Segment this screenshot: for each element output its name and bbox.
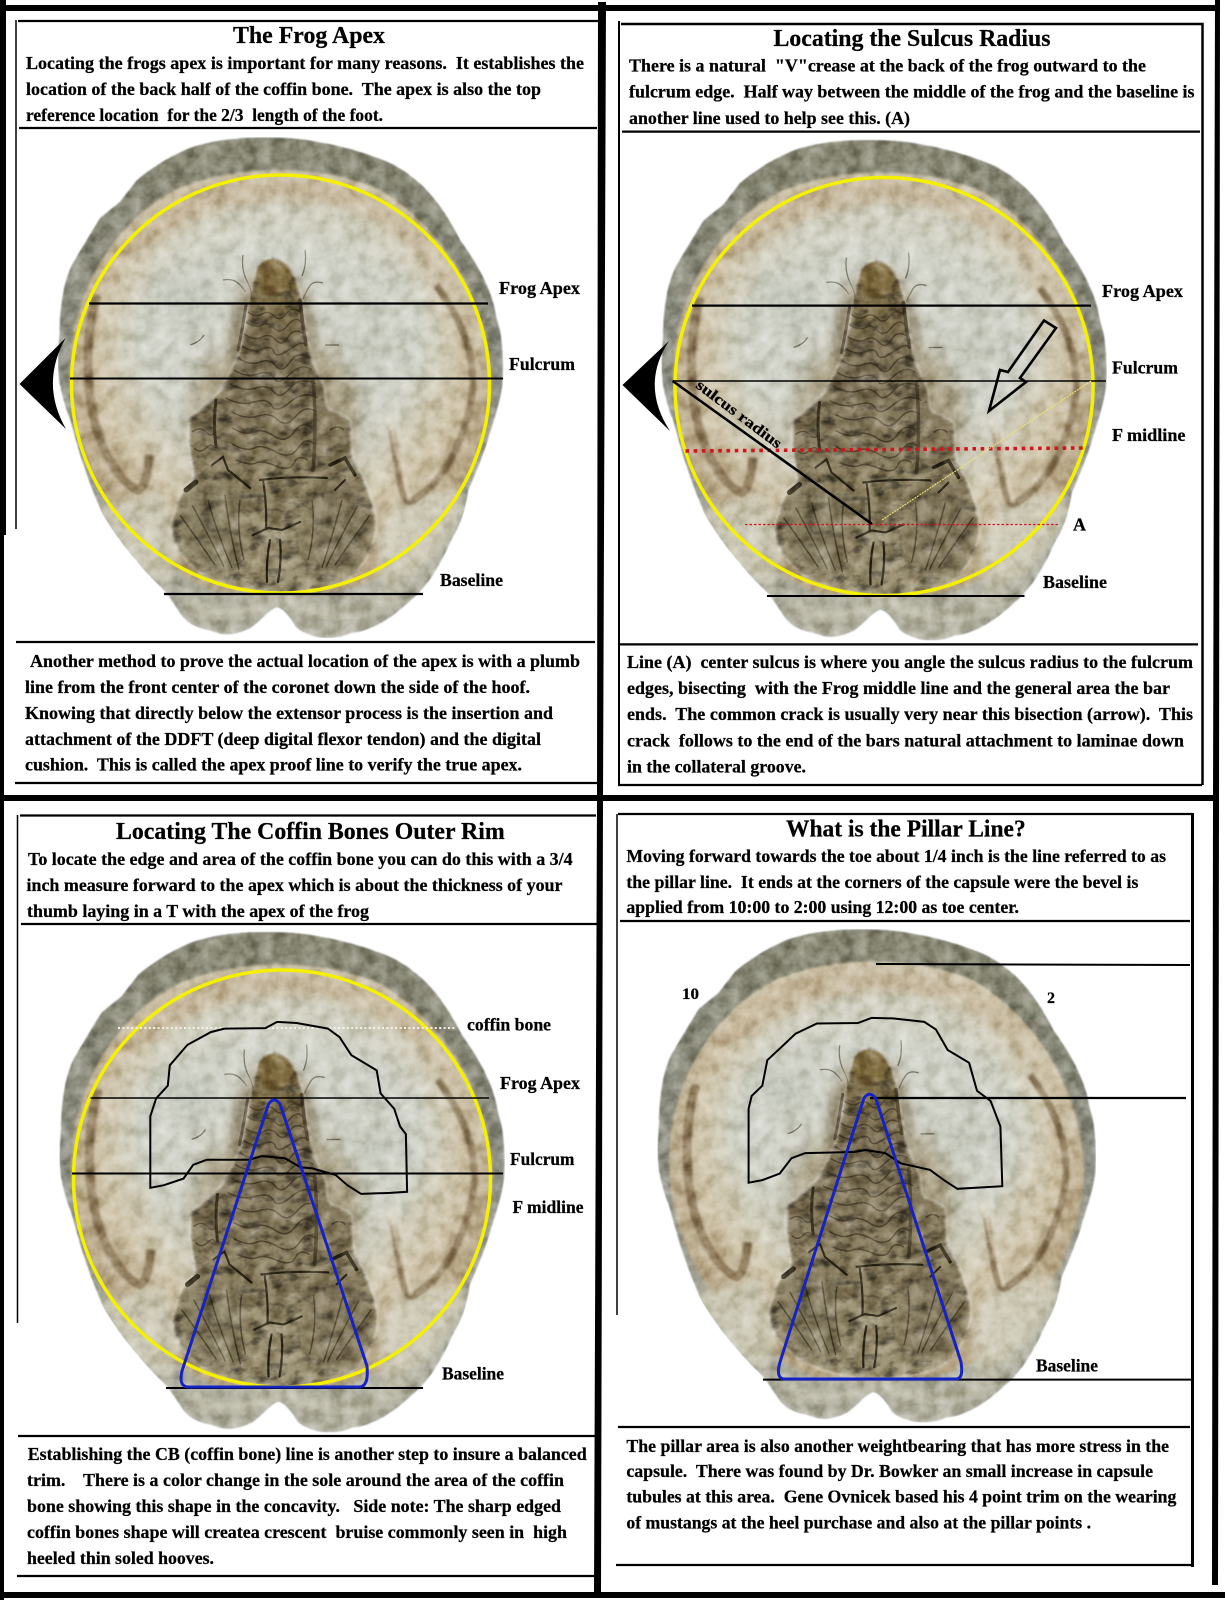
- lower text: [627, 652, 1193, 776]
- hoof illustration: [658, 929, 1096, 1422]
- panel: Locating the Sulcus Radius: [618, 21, 1202, 785]
- intro text: To locate the edge and area of the coffin bone you can do this with a 3/4: [28, 849, 573, 869]
- label: A: A: [1073, 515, 1086, 535]
- apex line: [870, 1097, 1186, 1099]
- lower text: of mustangs at the heel purchase and also at the pillar points .: [626, 1513, 1091, 1533]
- baseline line: [767, 595, 1024, 597]
- lower text: trim. There is a color change in the sole around the area of the coffin: [27, 1470, 564, 1490]
- label: Fulcrum: Fulcrum: [509, 354, 575, 374]
- coffin bone outline: [150, 1022, 407, 1194]
- lower text: attachment of the DDFT (deep digital flexor tendon) and the digital: [25, 729, 541, 750]
- intro text: [629, 56, 1194, 129]
- lower text: Line (A) center sulcus is where you angle the sulcus radius to the fulcrum: [627, 652, 1193, 673]
- frog apex line: [692, 305, 1091, 307]
- lower text: ends. The common crack is usually very near this bisection (arrow). This: [627, 704, 1193, 725]
- label: Frog Apex: Frog Apex: [500, 1073, 580, 1093]
- intro text: reference location for the 2/3 length of the foot.: [26, 105, 383, 125]
- baseline line: [763, 1379, 1191, 1381]
- F midline dotted: [686, 448, 1083, 451]
- lower text: coffin bones shape will createa crescent bruise commonly seen in high: [27, 1522, 567, 1542]
- coffin bone outline: [749, 1018, 1002, 1189]
- frog apex line: [90, 1097, 489, 1099]
- icon: crescent pointer: [20, 338, 66, 429]
- lower text: Establishing the CB (coffin bone) line is another step to insure a balanced: [28, 1444, 587, 1465]
- toe line: [876, 964, 1190, 965]
- lower text: [27, 1444, 587, 1568]
- title: Locating The Coffin Bones Outer Rim: Locating The Coffin Bones Outer Rim: [116, 819, 505, 845]
- yellow circle: [675, 178, 1093, 596]
- lower text: Another method to prove the actual location of the apex is with a plumb: [30, 651, 580, 671]
- blue triangle: [778, 1094, 962, 1379]
- intro text: inch measure forward to the apex which is about the thickness of your: [26, 875, 563, 895]
- intro text: Moving forward towards the toe about 1/4 inch is the line referred to as: [626, 846, 1166, 866]
- intro text: [26, 53, 584, 125]
- panel: What is the Pillar Line?: [616, 813, 1192, 1567]
- label: 10: 10: [682, 986, 699, 1003]
- lower text: heeled thin soled hooves.: [27, 1548, 214, 1568]
- label: F midline: F midline: [512, 1197, 584, 1217]
- line A dotted: [745, 524, 1060, 526]
- fulcrum line: [673, 380, 1106, 382]
- intro text: the pillar line. It ends at the corners of the capsule were the bevel is: [626, 872, 1138, 892]
- intro text: [626, 846, 1166, 917]
- fulcrum line: [70, 378, 503, 380]
- lower text: crack follows to the end of the bars natural attachment to laminae down: [627, 730, 1184, 750]
- label: Fulcrum: Fulcrum: [1112, 358, 1178, 378]
- hoof illustration: [58, 137, 503, 638]
- label: sulcus radius: sulcus radius: [693, 377, 785, 452]
- intro text: applied from 10:00 to 2:00 using 12:00 as toe center.: [626, 897, 1019, 917]
- title: Locating the Sulcus Radius: Locating the Sulcus Radius: [774, 26, 1050, 52]
- icon: crescent pointer: [622, 341, 670, 431]
- yellow bisecting line: [882, 381, 1091, 520]
- lower text: [626, 1436, 1176, 1533]
- lower text: capsule. There was found by Dr. Bowker an small increase in capsule: [626, 1461, 1153, 1481]
- intro text: another line used to help see this. (A): [629, 108, 910, 129]
- yellow circle: [72, 175, 490, 593]
- intro text: Locating the frogs apex is important for many reasons. It establishes the: [26, 53, 584, 73]
- lower text: line from the front center of the coronet down the side of the hoof.: [25, 677, 530, 697]
- lower text: Knowing that directly below the extensor process is the insertion and: [25, 703, 553, 723]
- arrow: crack location: [989, 320, 1056, 411]
- lower text: bone showing this shape in the concavity. Side note: The sharp edged: [27, 1496, 561, 1516]
- lower text: edges, bisecting with the Frog middle line and the general area the bar: [627, 678, 1170, 698]
- panel: The Frog Apex: [15, 20, 598, 783]
- intro text: There is a natural "V"crease at the back of the frog outward to the: [629, 56, 1146, 76]
- lower text: [25, 651, 580, 774]
- label: Fulcrum: Fulcrum: [510, 1149, 574, 1169]
- label: Baseline: Baseline: [1043, 572, 1107, 592]
- label: Frog Apex: Frog Apex: [1102, 281, 1183, 301]
- label: Baseline: Baseline: [442, 1364, 504, 1384]
- lower text: in the collateral groove.: [627, 756, 806, 776]
- blue triangle: [181, 1100, 367, 1387]
- lower text: cushion. This is called the apex proof line to verify the true apex.: [25, 754, 522, 774]
- intro text: fulcrum edge. Half way between the middle of the frog and the baseline is: [629, 82, 1194, 102]
- label: coffin bone: coffin bone: [467, 1015, 551, 1035]
- hoof illustration: [662, 140, 1107, 640]
- intro text: [26, 849, 573, 921]
- label: Baseline: Baseline: [440, 570, 503, 590]
- lower text: tubules at this area. Gene Ovnicek based his 4 point trim on the wearing: [626, 1486, 1176, 1506]
- yellow circle: [74, 970, 490, 1387]
- panel: Locating The Coffin Bones Outer Rim: [17, 815, 597, 1576]
- label: Baseline: Baseline: [1036, 1355, 1098, 1375]
- baseline line: [164, 593, 423, 595]
- frog apex line: [89, 302, 488, 305]
- title: The Frog Apex: The Frog Apex: [233, 23, 385, 49]
- label: 2: 2: [1047, 990, 1055, 1007]
- baseline line: [166, 1387, 423, 1389]
- label: F midline: F midline: [1112, 425, 1186, 445]
- title: What is the Pillar Line?: What is the Pillar Line?: [786, 817, 1026, 843]
- intro text: location of the back half of the coffin bone. The apex is also the top: [26, 79, 541, 99]
- fulcrum line: [72, 1172, 503, 1174]
- lower text: The pillar area is also another weightbearing that has more stress in the: [626, 1436, 1169, 1456]
- label: Frog Apex: Frog Apex: [499, 278, 580, 298]
- hoof illustration: [60, 932, 505, 1432]
- intro text: thumb laying in a T with the apex of the frog: [27, 901, 369, 921]
- coffin bone dotted line: [118, 1027, 455, 1029]
- sulcus radius line: [673, 381, 872, 524]
